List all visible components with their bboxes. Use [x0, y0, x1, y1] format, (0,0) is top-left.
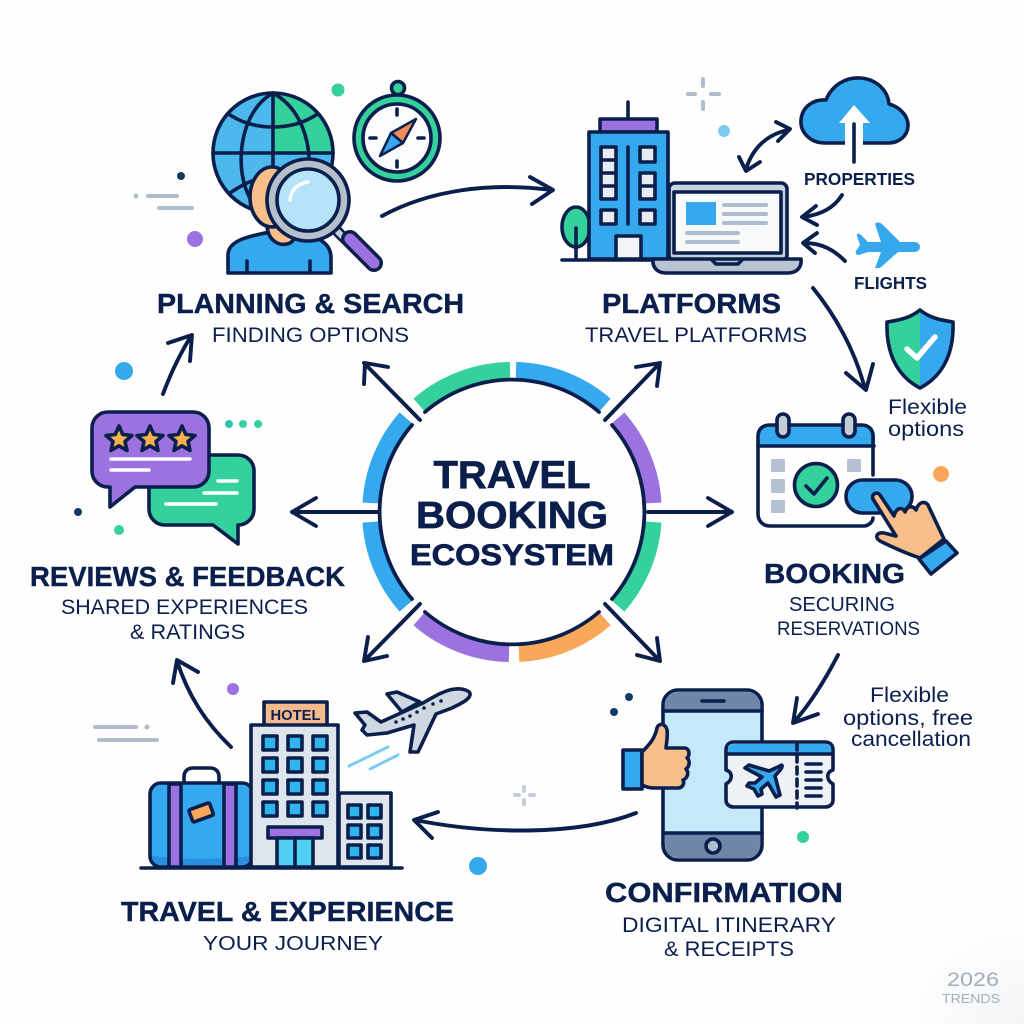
label: flexible options: Flexible: [888, 396, 967, 419]
label: flights: FLIGHTS: [854, 273, 927, 293]
label: properties: PROPERTIES: [804, 169, 915, 189]
person: [228, 167, 331, 273]
decorative dots: [74, 362, 262, 535]
hub title: BOOKING: [416, 495, 608, 537]
tree: [562, 207, 590, 259]
label: flexible options free cancellation: cancellation: [851, 728, 971, 751]
icon: travel suitcase, hotel and plane: [141, 689, 470, 868]
icon: flight plane: [856, 222, 920, 268]
heading: reviews and feedback: [30, 561, 345, 644]
heading: planning and search: [157, 288, 464, 347]
hub inner dark ring: [380, 380, 644, 644]
arrow: confirmation to travel: [414, 812, 636, 838]
magnifying glass: [267, 159, 374, 263]
heading: platforms: TRAVEL PLATFORMS: [585, 324, 807, 347]
label: flexible options: [888, 396, 967, 441]
heading: booking: RESERVATIONS: [777, 619, 920, 640]
icon: booking calendar and hand: [758, 414, 957, 574]
arrow: planning to platforms: [382, 177, 553, 216]
icon: confirmation phone, thumb and ticket: [623, 690, 833, 860]
label: flexible options: options: [888, 418, 964, 441]
heading: booking: BOOKING: [764, 558, 905, 589]
arrow: platforms and properties double arrow: [739, 122, 790, 171]
arrow: platforms to booking: [813, 288, 873, 390]
arrow: flights to laptop: [803, 233, 845, 261]
calendar: [758, 414, 875, 526]
arrow: properties to laptop: [802, 195, 842, 225]
label: flexible options free cancellation: [843, 684, 973, 751]
decorative sparkle and blue dot: [469, 787, 534, 875]
ticket: [726, 742, 833, 808]
heading: platforms: [585, 288, 807, 347]
heading: booking: SECURING: [789, 594, 895, 616]
heading: travel and experience: YOUR JOURNEY: [203, 933, 383, 955]
watermark: 2026 trends: [942, 970, 1000, 1006]
icon: reviews speech bubbles: [92, 412, 254, 544]
hub coloured ring segments: [371, 370, 653, 654]
icon: shield with check: [887, 310, 953, 388]
hub title: TRAVEL: [434, 454, 590, 497]
decorative dots and dashes: [134, 84, 344, 247]
hub title: ECOSYSTEM: [410, 539, 614, 572]
decorative orange dot: [933, 466, 949, 482]
purple bubble with stars: [92, 412, 209, 507]
hotel building: [141, 702, 402, 868]
heading: confirmation: DIGITAL ITINERARY: [622, 914, 836, 937]
green bubble: [149, 455, 254, 544]
heading: reviews and feedback: REVIEWS & FEEDBACK: [30, 561, 345, 592]
arrow: travel to reviews: [173, 660, 231, 747]
decorative sparkle and dot: [688, 79, 730, 137]
office building: [562, 102, 668, 260]
arrow: booking to confirmation: [793, 655, 838, 723]
heading: travel and experience: [121, 896, 454, 955]
arrow: reviews to planning: [163, 335, 192, 394]
heading: planning and search: FINDING OPTIONS: [212, 324, 409, 347]
label: flexible options free cancellation: Flexible: [870, 684, 949, 707]
central hub: travel booking ecosystem: [371, 370, 653, 654]
heading: reviews and feedback: & RATINGS: [130, 621, 245, 644]
icon: platforms building and laptop: [562, 102, 801, 273]
decorative dots and dashes: [95, 683, 239, 740]
heading: confirmation: CONFIRMATION: [605, 877, 843, 908]
heading: platforms: PLATFORMS: [602, 288, 781, 319]
phone: [663, 690, 762, 860]
watermark: 2026 trends: TRENDS: [942, 991, 1000, 1006]
heading: planning and search: PLANNING & SEARCH: [157, 288, 464, 319]
heading: reviews and feedback: SHARED EXPERIENCES: [61, 596, 308, 619]
watermark: 2026 trends: 2026: [947, 970, 999, 991]
globe: [213, 93, 333, 213]
heading: confirmation: & RECEIPTS: [664, 938, 794, 961]
label: flexible options free cancellation: options, free: [843, 707, 973, 730]
suitcase: [150, 768, 253, 867]
icon: planning and search: [134, 82, 440, 273]
hub title: [410, 454, 614, 572]
pointing hand: [873, 493, 957, 574]
heading: travel and experience: TRAVEL & EXPERIENCE: [121, 896, 454, 927]
laptop: [653, 183, 801, 273]
thumbs up hand: [623, 724, 689, 789]
button: [846, 480, 912, 513]
heading: confirmation: [605, 877, 843, 961]
compass: [354, 82, 440, 181]
heading: booking: [764, 558, 920, 640]
hotel building: HOTEL: [270, 708, 321, 724]
airplane: [349, 689, 470, 769]
icon: cloud upload: [801, 78, 908, 162]
spoke arrows from hub: [292, 363, 732, 661]
decorative dots: [610, 693, 809, 843]
